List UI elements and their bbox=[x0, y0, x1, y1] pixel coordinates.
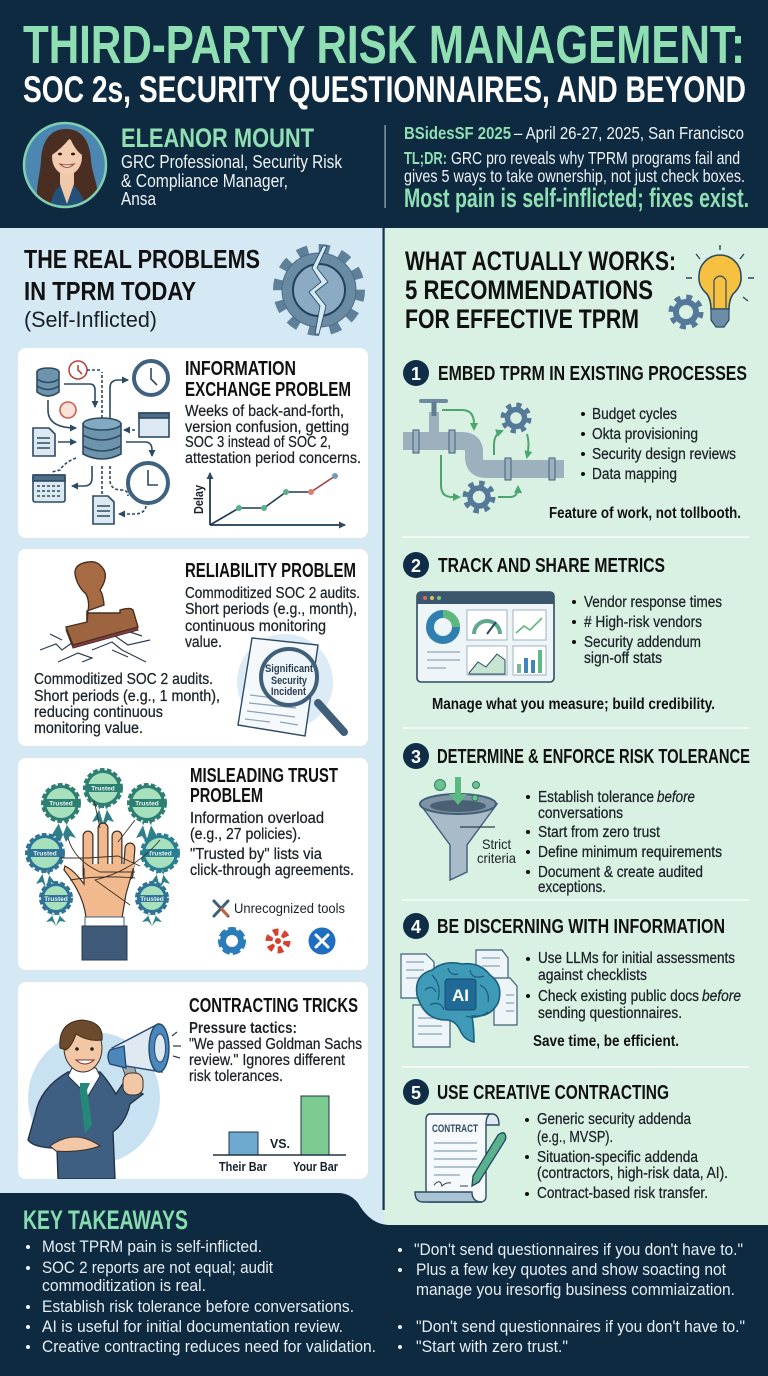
left heading bbox=[24, 244, 260, 332]
heading: information exchange: EXCHANGE PROBLEM bbox=[185, 378, 351, 401]
list: recommendation 5: (contractors, high-risk data, AI). bbox=[537, 1165, 728, 1182]
bar comparison: Your Bar bbox=[293, 1159, 338, 1174]
list: recommendation 5 bbox=[525, 1111, 728, 1202]
list: recommendation 1: Security design reviews bbox=[592, 446, 736, 463]
left heading: THE REAL PROBLEMS bbox=[24, 244, 260, 274]
list: takeaways right: "Don't send questionnaires if you don't have to." bbox=[416, 1317, 745, 1336]
icon: lightbulb and gear bbox=[671, 245, 754, 327]
text: reliability upper: Commoditized SOC 2 audits. bbox=[185, 585, 360, 602]
list: recommendation 3: Define minimum requirements bbox=[538, 844, 722, 861]
panel: recommendations bbox=[382, 228, 768, 1226]
icon: trust badges: Trusted bbox=[44, 896, 68, 903]
illustration: man with megaphone bbox=[28, 1020, 181, 1179]
text: information exchange body bbox=[185, 403, 361, 467]
speaker details: Ansa bbox=[121, 189, 157, 209]
right heading: FOR EFFECTIVE TPRM bbox=[405, 304, 639, 334]
heading: information exchange: INFORMATION bbox=[185, 357, 296, 380]
icon: metrics dashboard bbox=[417, 592, 554, 682]
text: reliability upper: value. bbox=[185, 634, 222, 651]
list: takeaways left: Most TPRM pain is self-inflicted. bbox=[42, 1237, 262, 1256]
list: takeaways left bbox=[26, 1237, 376, 1356]
heading: information exchange bbox=[185, 357, 351, 401]
list: recommendation 4: Check existing public docs bbox=[538, 988, 699, 1005]
list: takeaways right: "Don't send questionnaires if you don't have to." bbox=[414, 1240, 743, 1259]
speaker portrait bbox=[24, 123, 106, 208]
list: takeaways left: commoditization is real. bbox=[42, 1276, 206, 1295]
list: takeaways left: AI is useful for initial documentation review. bbox=[42, 1317, 343, 1336]
left heading: IN TPRM TODAY bbox=[24, 276, 196, 306]
text: misleading trust body: (e.g., 27 policies). bbox=[190, 826, 301, 843]
icon: trust badges: Trusted bbox=[91, 786, 115, 792]
speaker details bbox=[121, 123, 343, 209]
icon: filter funnel: Strict bbox=[482, 836, 511, 852]
callout: recommendation 4: Save time, be efficient. bbox=[533, 1033, 679, 1050]
icon: trust badges: Trusted bbox=[33, 850, 57, 858]
list: takeaways right: "Start with zero trust." bbox=[416, 1337, 568, 1356]
panel: the real problems bbox=[0, 228, 384, 1226]
text: information exchange body: Weeks of back-and-forth, bbox=[185, 403, 344, 420]
list: recommendation 3: conversations bbox=[538, 805, 623, 822]
text: reliability lower: reducing continuous bbox=[34, 704, 163, 721]
icon: data flow network bbox=[33, 361, 169, 524]
list: takeaways right: manage you iresorfig business commiaization. bbox=[416, 1280, 735, 1299]
talk summary bbox=[404, 123, 749, 213]
icon: contract and pen bbox=[415, 1114, 506, 1202]
icon: contract and pen: CONTRACT bbox=[432, 1123, 478, 1135]
recommendation 5: 5 bbox=[411, 1083, 421, 1103]
unrecognized tools: Unrecognized tools bbox=[234, 900, 345, 916]
heading: reliability: RELIABILITY PROBLEM bbox=[185, 559, 356, 582]
speaker details: & Compliance Manager, bbox=[121, 171, 288, 191]
heading: misleading trust: PROBLEM bbox=[190, 784, 263, 807]
header band bbox=[22, 25, 748, 212]
list: takeaways left: SOC 2 reports are not equal; audit bbox=[42, 1258, 273, 1277]
right heading: WHAT ACTUALLY WORKS: bbox=[405, 246, 676, 276]
recommendation 4 bbox=[401, 913, 741, 1050]
recommendation 3 bbox=[403, 743, 750, 896]
list: recommendation 1 bbox=[581, 406, 736, 483]
list: recommendation 1: Data mapping bbox=[592, 466, 677, 483]
list: recommendation 2: Security addendum bbox=[584, 634, 701, 651]
text: information exchange body: version confusion, getting bbox=[185, 419, 349, 436]
icon: magnifier on report: Significant bbox=[265, 663, 313, 675]
icon: rubber stamp bbox=[40, 562, 150, 662]
right heading: 5 RECOMMENDATIONS bbox=[405, 275, 653, 305]
recommendation 4: 4 bbox=[411, 917, 421, 937]
panel: reliability bbox=[18, 549, 368, 746]
list: recommendation 3 bbox=[526, 789, 722, 896]
list: recommendation 4: sending questionnaires. bbox=[538, 1005, 682, 1022]
text: reliability lower bbox=[34, 671, 220, 737]
list: recommendation 2 bbox=[572, 594, 722, 667]
speaker details: ELEANOR MOUNT bbox=[121, 123, 314, 153]
icon: trust badges: Trusted bbox=[140, 896, 164, 903]
list: takeaways left: Creative contracting reduces need for validation. bbox=[42, 1337, 376, 1356]
list: recommendation 4: against checklists bbox=[538, 967, 647, 984]
text: contracting body bbox=[189, 1020, 362, 1085]
recommendation 5: USE CREATIVE CONTRACTING bbox=[437, 1081, 669, 1104]
list: recommendation 3: before bbox=[657, 789, 695, 806]
panel: contracting tricks bbox=[18, 982, 368, 1179]
icon: magnifier on report bbox=[237, 634, 344, 736]
talk summary: TL;DR: bbox=[404, 148, 447, 168]
text: reliability upper bbox=[185, 585, 360, 651]
speaker details: GRC Professional, Security Risk bbox=[121, 152, 343, 172]
text: contracting body: Pressure tactics: bbox=[189, 1020, 297, 1037]
text: reliability upper: continuous monitoring bbox=[185, 618, 326, 635]
text: misleading trust body: "Trusted by" lists via bbox=[190, 846, 322, 863]
recommendation 1: 1 bbox=[411, 364, 421, 384]
icon: trust badges: Trusted bbox=[135, 800, 159, 808]
recommendation 2 bbox=[403, 552, 722, 713]
icon: magnifier on report: Security bbox=[271, 675, 308, 687]
title bbox=[23, 15, 746, 110]
heading: misleading trust bbox=[190, 764, 338, 807]
text: contracting body: review." Ignores different bbox=[189, 1052, 346, 1069]
list: recommendation 5: Situation-specific addenda bbox=[537, 1149, 698, 1166]
list: recommendation 1: Budget cycles bbox=[592, 406, 677, 423]
text: information exchange body: attestation period concerns. bbox=[185, 450, 361, 467]
list: recommendation 2: sign-off stats bbox=[584, 650, 662, 667]
bar comparison: Their Bar bbox=[219, 1159, 267, 1174]
list: takeaways right: Plus a few key quotes and show soacting not bbox=[416, 1260, 726, 1279]
recommendation 2: 2 bbox=[411, 556, 421, 576]
recommendation 3: 3 bbox=[411, 747, 421, 767]
recommendation 1 bbox=[403, 360, 747, 522]
text: reliability lower: monitoring value. bbox=[34, 720, 143, 737]
list: recommendation 4: Use LLMs for initial assessments bbox=[538, 950, 735, 967]
list: recommendation 5: Generic security addenda bbox=[537, 1111, 691, 1128]
list: recommendation 3: Document & create audited bbox=[538, 864, 703, 881]
list: takeaways left: Establish risk tolerance before conversations. bbox=[42, 1297, 354, 1316]
icon: AI brain and documents: AI bbox=[452, 986, 469, 1005]
list: recommendation 2: Vendor response times bbox=[584, 594, 722, 611]
list: recommendation 2: # High-risk vendors bbox=[584, 614, 702, 631]
list: recommendation 3: exceptions. bbox=[538, 879, 606, 896]
talk summary: BSidesSF 2025 bbox=[404, 123, 511, 143]
list: recommendation 5: (e.g., MVSP). bbox=[537, 1129, 613, 1146]
heading: contracting tricks: CONTRACTING TRICKS bbox=[189, 994, 358, 1017]
heading: misleading trust: MISLEADING TRUST bbox=[190, 764, 338, 787]
text: misleading trust body: Information overload bbox=[190, 810, 324, 827]
line chart: delay: Delay bbox=[191, 484, 206, 514]
panel: information exchange bbox=[18, 348, 368, 538]
text: reliability lower: Short periods (e.g., 1 month), bbox=[34, 688, 220, 705]
list: recommendation 4: before bbox=[702, 988, 741, 1005]
text: contracting body: risk tolerances. bbox=[189, 1068, 283, 1085]
left heading: (Self-Inflicted) bbox=[24, 307, 157, 332]
icon: AI brain and documents bbox=[401, 950, 517, 1047]
recommendation 5 bbox=[403, 1079, 728, 1202]
icon: hand tangled in strings bbox=[60, 800, 160, 960]
text: information exchange body: SOC 3 instead of SOC 2, bbox=[185, 434, 331, 451]
list: recommendation 1: Okta provisioning bbox=[592, 426, 698, 443]
icon: filter funnel: criteria bbox=[477, 850, 516, 866]
unrecognized tools bbox=[214, 900, 345, 954]
text: misleading trust body bbox=[190, 810, 354, 879]
text: reliability lower: Commoditized SOC 2 audits. bbox=[34, 671, 213, 688]
icon: pipe with gears bbox=[403, 401, 564, 511]
list: recommendation 4 bbox=[526, 950, 741, 1022]
line chart: delay bbox=[191, 473, 345, 525]
icon: trust badges bbox=[27, 770, 178, 926]
list: takeaways right bbox=[398, 1240, 745, 1356]
heading: key takeaways: KEY TAKEAWAYS bbox=[23, 1205, 188, 1235]
bar comparison: VS. bbox=[270, 1136, 290, 1151]
icon: trust badges: Trusted bbox=[49, 800, 73, 808]
text: contracting body: "We passed Goldman Sachs bbox=[189, 1036, 362, 1053]
panel: misleading trust bbox=[18, 758, 368, 970]
text: misleading trust body: click-through agreements. bbox=[190, 862, 354, 879]
text: reliability upper: Short periods (e.g., month), bbox=[185, 601, 357, 618]
icon: magnifier on report: Incident bbox=[271, 686, 306, 698]
icon: trust badges: Trusted bbox=[148, 850, 172, 858]
list: recommendation 5: Contract-based risk transfer. bbox=[537, 1185, 708, 1202]
callout: recommendation 2: Manage what you measure; build credibility. bbox=[432, 696, 715, 713]
recommendation 2: TRACK AND SHARE METRICS bbox=[438, 554, 665, 577]
key takeaways band bbox=[0, 1193, 768, 1376]
list: recommendation 3: Establish tolerance bbox=[538, 789, 654, 806]
list: recommendation 3: Start from zero trust bbox=[538, 824, 661, 841]
icon: filter funnel bbox=[420, 777, 516, 880]
bar comparison bbox=[213, 1096, 346, 1174]
icon: broken gear bbox=[278, 246, 360, 334]
right heading bbox=[405, 246, 676, 334]
